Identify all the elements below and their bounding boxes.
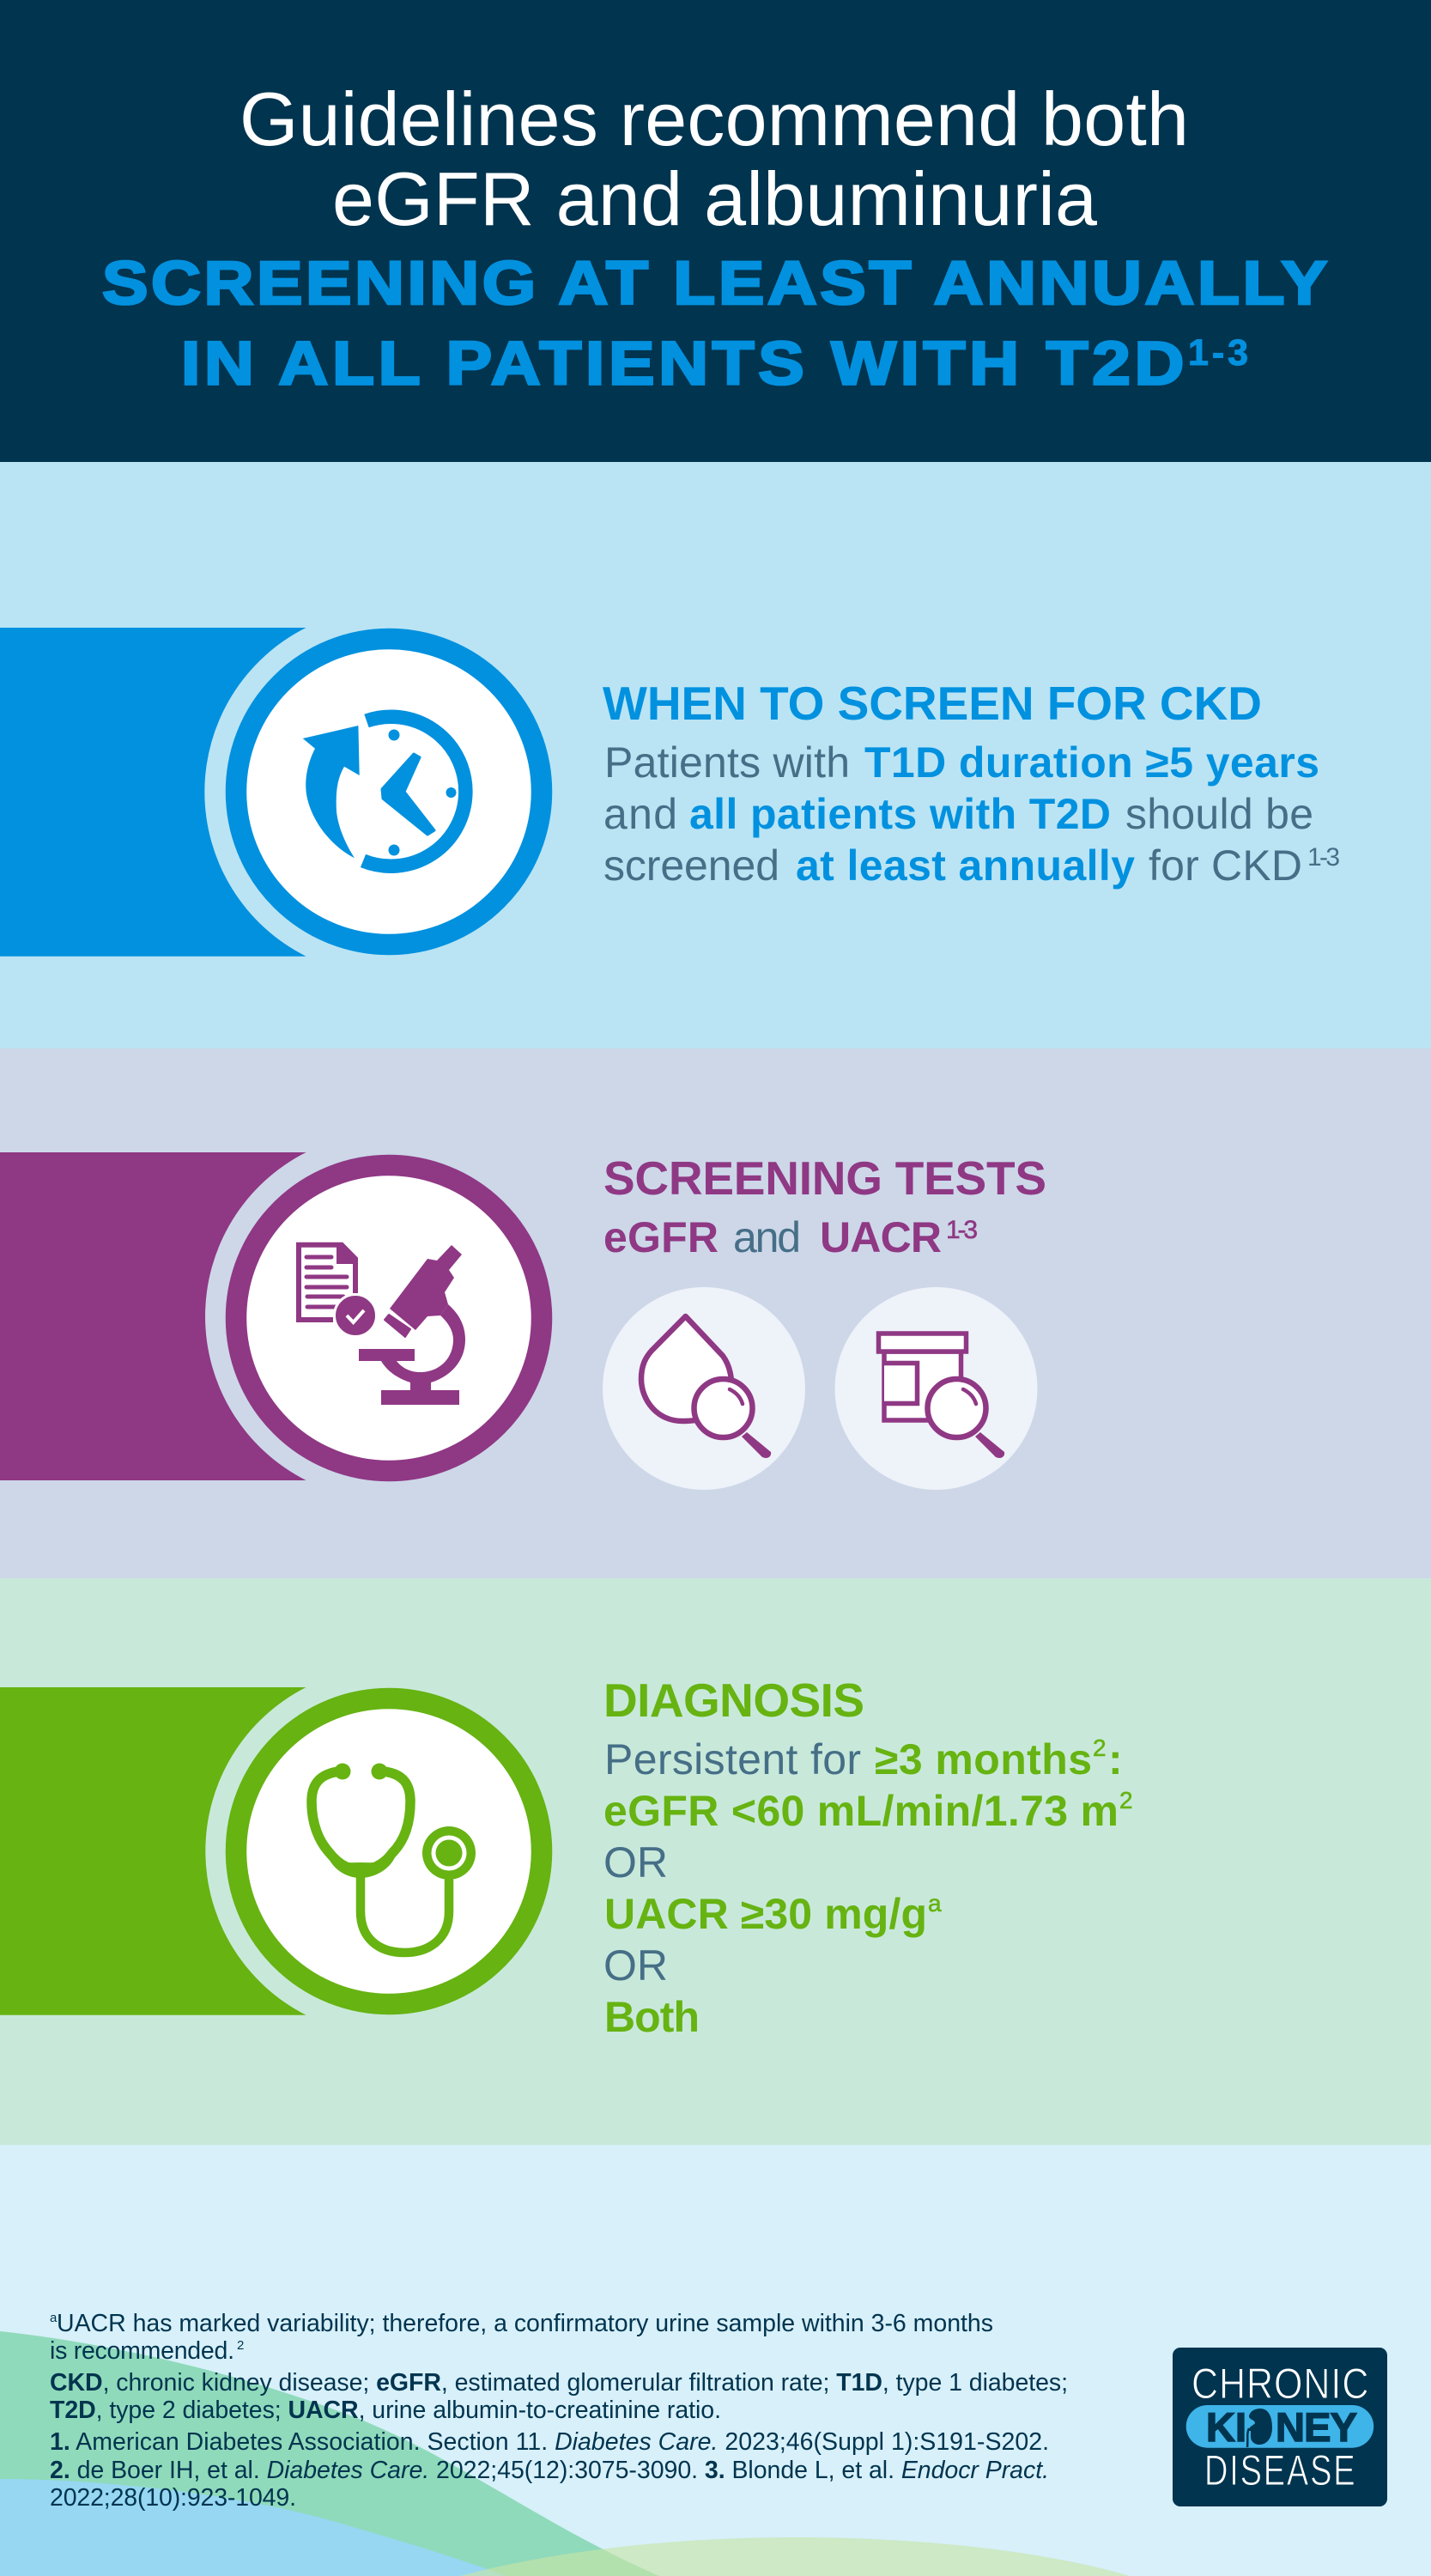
footnotes and references: a xyxy=(50,2311,58,2325)
logo: chronic kidney disease: KI xyxy=(1206,2404,1246,2450)
title: white lines: eGFR and albuminuria xyxy=(332,156,1097,241)
text block: diagnosis criteria: a xyxy=(928,1890,942,1917)
footnotes and references xyxy=(50,2310,1068,2512)
logo: chronic kidney disease: NEY xyxy=(1276,2404,1357,2450)
colored bar: purple xyxy=(0,1152,306,1480)
text block: when to screen: all patients with T2D xyxy=(689,790,1111,838)
logo: chronic kidney disease: DISEASE xyxy=(1204,2447,1355,2494)
title: blue emphasis lines: 1-3 xyxy=(1188,332,1248,374)
text block: diagnosis criteria: OR xyxy=(603,1941,668,1990)
footnotes and references: CKD, chronic kidney disease; eGFR, estimated glomerular filtration rate; T1D, type 1 diabetes; xyxy=(50,2369,1068,2397)
title: white lines: Guidelines recommend both xyxy=(240,76,1189,161)
panel: diagnosis xyxy=(0,1578,1431,2145)
text block: tests: 1-3 xyxy=(946,1216,978,1244)
text block: diagnosis criteria: : xyxy=(1108,1735,1123,1783)
text block: diagnosis criteria: Both xyxy=(604,1993,700,2041)
text block: when to screen: should be xyxy=(1125,790,1313,838)
text block: when to screen: and xyxy=(603,790,677,838)
heading: diagnosis: DIAGNOSIS xyxy=(603,1674,864,1727)
footnotes and references: T2D, type 2 diabetes; UACR, urine albumin-to-creatinine ratio. xyxy=(50,2397,721,2424)
footnotes and references: UACR has marked variability; therefore, a confirmatory urine sample within 3-6 months xyxy=(57,2310,993,2337)
colored bar: blue xyxy=(0,628,306,957)
text block: diagnosis criteria: OR xyxy=(603,1838,668,1886)
text block: diagnosis criteria xyxy=(603,1735,1133,2041)
text block: diagnosis criteria: UACR ≥30 mg/g xyxy=(604,1890,927,1938)
panel: footer xyxy=(0,2145,1431,2576)
title: blue emphasis lines: SCREENING AT LEAST ANNUALLY xyxy=(102,249,1327,318)
panel: when to screen xyxy=(0,462,1431,1048)
text block: diagnosis criteria: 2 xyxy=(1119,1787,1133,1814)
panel: header xyxy=(0,0,1431,462)
icon: urine sample jar with magnifier xyxy=(834,1287,1037,1490)
text block: tests: and xyxy=(733,1213,801,1261)
text block: tests: UACR xyxy=(820,1213,942,1261)
icon: stethoscope xyxy=(236,1698,542,2004)
icon: document and microscope xyxy=(236,1165,542,1471)
text block: tests xyxy=(603,1213,978,1261)
footnotes and references: 2022;28(10):923-1049. xyxy=(50,2484,296,2512)
decorative curved shapes xyxy=(0,2331,1130,2576)
text block: when to screen: 1-3 xyxy=(1307,843,1340,872)
title: blue emphasis lines: IN ALL PATIENTS WITH T2D xyxy=(181,330,1184,398)
heading: when to screen: WHEN TO SCREEN FOR CKD xyxy=(603,677,1262,730)
logo: chronic kidney disease: CHRONIC xyxy=(1191,2360,1368,2408)
text block: when to screen: T1D duration ≥5 years xyxy=(864,738,1319,787)
heading: screening tests: SCREENING TESTS xyxy=(603,1151,1046,1205)
footnotes and references: 2 xyxy=(237,2338,244,2353)
text block: when to screen: screened xyxy=(603,841,779,890)
text block: when to screen: at least annually xyxy=(796,841,1135,890)
text block: diagnosis criteria: Persistent for xyxy=(604,1735,861,1783)
icon: clock with arrow xyxy=(236,639,542,945)
footnotes and references: is recommended. xyxy=(50,2337,234,2365)
text block: when to screen: for CKD xyxy=(1149,841,1302,890)
icon: blood drop with magnifier xyxy=(603,1287,805,1490)
text block: diagnosis criteria: ≥3 months xyxy=(875,1735,1092,1783)
title: blue emphasis lines xyxy=(102,249,1327,398)
text block: when to screen xyxy=(603,738,1340,890)
text block: when to screen: Patients with xyxy=(604,738,850,787)
panel: screening tests xyxy=(0,1048,1431,1578)
logo: chronic kidney disease xyxy=(1173,2348,1387,2506)
title: white lines xyxy=(240,76,1189,241)
footnotes and references: 1. American Diabetes Association. Section 11. Diabetes Care. 2023;46(Suppl 1):S191-S202. xyxy=(50,2428,1049,2456)
text block: diagnosis criteria: eGFR <60 mL/min/1.73 m xyxy=(603,1787,1119,1835)
colored bar: green xyxy=(0,1687,306,2015)
footnotes and references: 2. de Boer IH, et al. Diabetes Care. 2022;45(12):3075-3090. 3. Blonde L, et al. Endocr Pract. xyxy=(50,2457,1049,2484)
text block: diagnosis criteria: 2 xyxy=(1093,1735,1107,1761)
text block: tests: eGFR xyxy=(603,1213,719,1261)
